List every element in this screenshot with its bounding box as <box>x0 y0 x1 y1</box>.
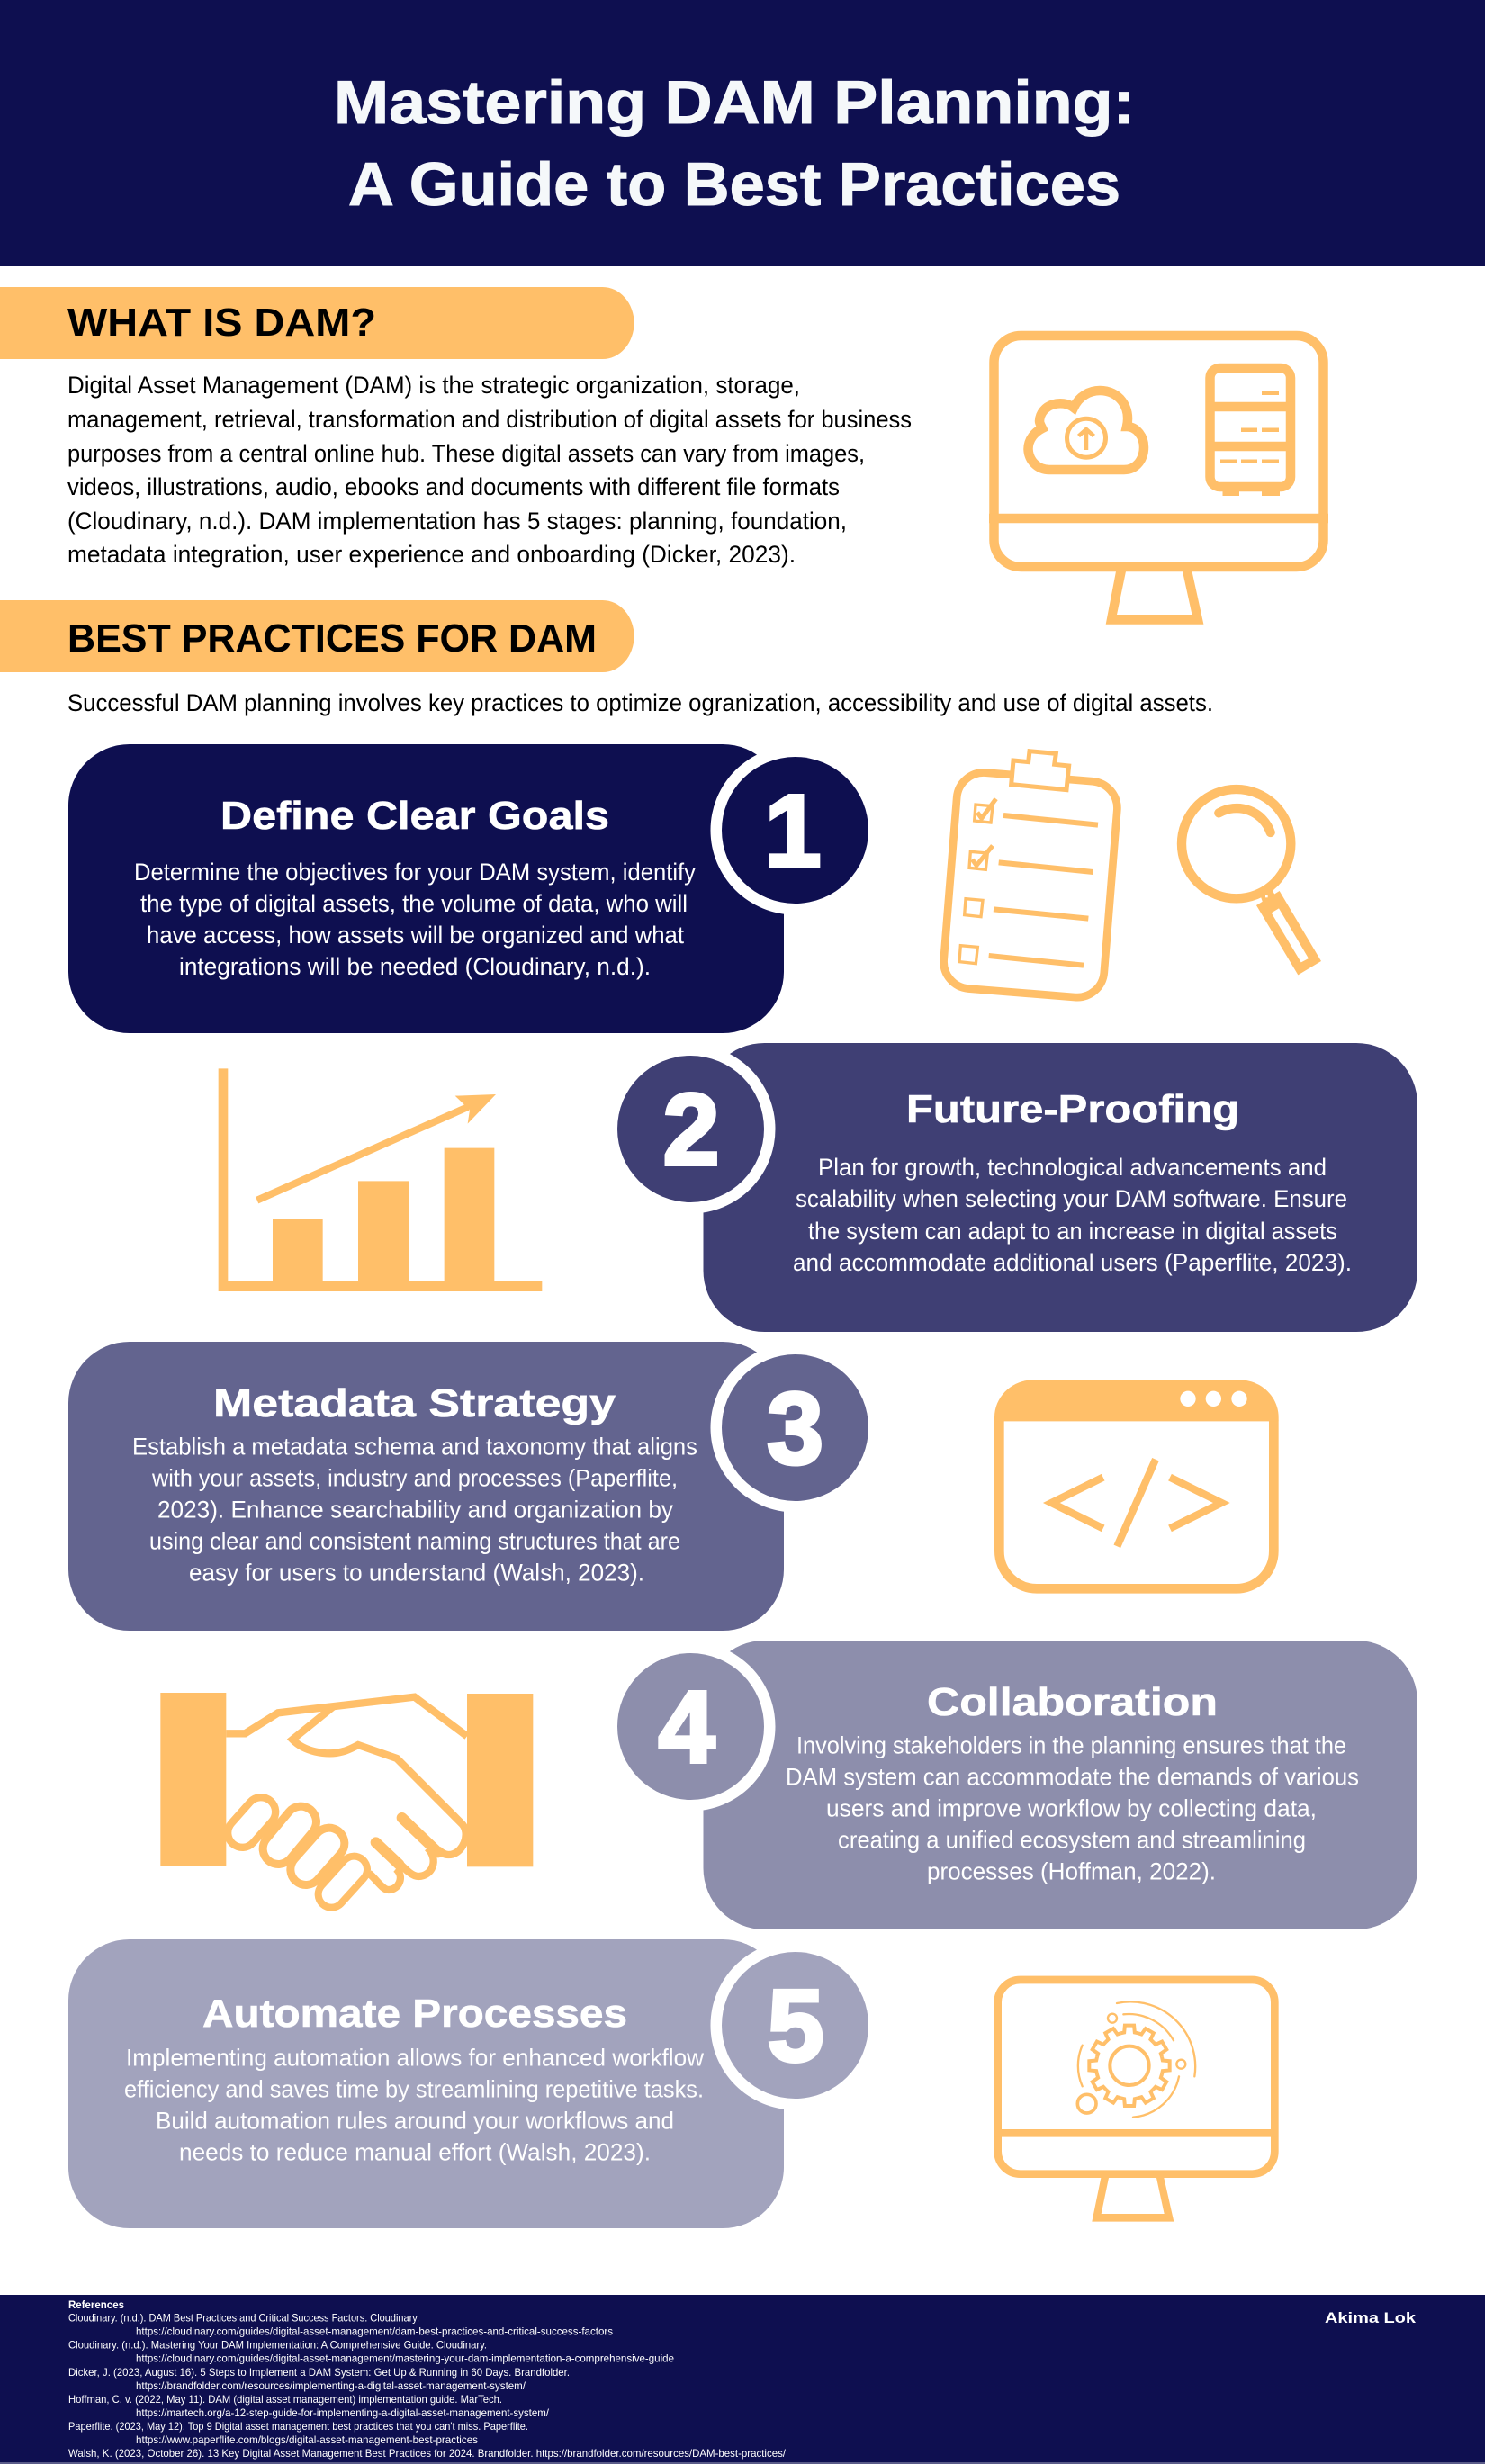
number badge 3: 3 <box>767 1371 824 1485</box>
text block: DAM definition: (Cloudinary, n.d.). DAM implementation has 5 stages: planning, foundation, <box>68 508 847 535</box>
body text: the system can adapt to an increase in digital assets <box>808 1218 1337 1245</box>
icon: magnifying glass <box>1182 789 1321 975</box>
body text: processes (Hoffman, 2022). <box>927 1857 1216 1884</box>
body text: using clear and consistent naming structures that are <box>149 1528 680 1555</box>
text block: DAM definition: management, retrieval, transformation and distribution of digital assets for business <box>68 406 912 433</box>
references <box>68 2298 787 2460</box>
number badge 2 <box>607 1044 776 1213</box>
heading: Metadata Strategy <box>213 1381 616 1425</box>
number badge 1: 1 <box>765 774 821 887</box>
body text: with your assets, industry and processes (Paperflite, <box>151 1465 678 1492</box>
text block: DAM definition: purposes from a central online hub. These digital assets can vary from images, <box>68 440 865 467</box>
body text: needs to reduce manual effort (Walsh, 2023). <box>179 2138 651 2165</box>
icon: growth bar chart <box>219 1068 542 1291</box>
body text: Determine the objectives for your DAM system, identify <box>134 859 696 886</box>
body text <box>132 1433 698 1586</box>
number badge 5 <box>711 1940 880 2109</box>
heading: Define Clear Goals <box>220 794 609 838</box>
author credit: Akima Lok <box>1325 2309 1417 2326</box>
references: https://www.paperflite.com/blogs/digital-asset-management-best-practices <box>136 2433 478 2446</box>
body text: DAM system can accommodate the demands of various <box>786 1764 1359 1791</box>
body text: Establish a metadata schema and taxonomy that aligns <box>132 1433 698 1460</box>
section heading: what is DAM: WHAT IS DAM? <box>68 301 376 345</box>
number badge 1 <box>711 745 880 914</box>
number badge 4: 4 <box>659 1670 716 1784</box>
icon: monitor with gear <box>994 1980 1278 2222</box>
number badge 4 <box>607 1641 776 1811</box>
heading: Future-Proofing <box>906 1087 1239 1131</box>
icon: monitor with cloud and server <box>989 336 1328 625</box>
footer band <box>0 2295 1485 2464</box>
body text: users and improve workflow by collecting data, <box>826 1794 1317 1821</box>
body text: have access, how assets will be organized and what <box>147 922 684 949</box>
body text: Build automation rules around your workflows and <box>156 2108 674 2135</box>
title: A Guide to Best Practices <box>348 150 1120 219</box>
references: References <box>68 2298 124 2311</box>
panel: 4 collaboration <box>607 1641 1418 1929</box>
body text: scalability when selecting your DAM software. Ensure <box>796 1185 1347 1212</box>
references: https://martech.org/a-12-step-guide-for-implementing-a-digital-asset-management-system/ <box>136 2406 550 2419</box>
heading: Automate Processes <box>202 1992 627 2036</box>
section heading: best practices <box>0 600 634 672</box>
body text: Implementing automation allows for enhanced workflow <box>126 2045 704 2072</box>
body text <box>134 859 696 980</box>
panel: 3 metadata strategy <box>68 1342 880 1631</box>
body text: easy for users to understand (Walsh, 2023). <box>189 1559 644 1586</box>
body text <box>124 2045 704 2165</box>
icon: code window <box>994 1380 1279 1588</box>
body text: and accommodate additional users (Paperflite, 2023). <box>793 1249 1352 1276</box>
references: Cloudinary. (n.d.). Mastering Your DAM Implementation: A Comprehensive Guide. Cloudinary. <box>68 2338 487 2351</box>
title <box>334 68 1135 219</box>
text block: best practices intro: Successful DAM planning involves key practices to optimize ogranization, accessibility and use of digital assets. <box>68 689 1213 716</box>
title: Mastering DAM Planning: <box>334 68 1135 137</box>
panel: 5 automate processes <box>68 1939 880 2228</box>
body text <box>793 1154 1352 1276</box>
heading: Collaboration <box>927 1680 1218 1724</box>
references: Cloudinary. (n.d.). DAM Best Practices and Critical Success Factors. Cloudinary. <box>68 2311 419 2324</box>
body text: Plan for growth, technological advancements and <box>818 1154 1327 1181</box>
number badge 3 <box>711 1343 880 1512</box>
references: https://brandfolder.com/resources/implementing-a-digital-asset-management-system/ <box>136 2379 526 2392</box>
text block: DAM definition: Digital Asset Management (DAM) is the strategic organization, storage, <box>68 372 800 399</box>
text block: DAM definition: videos, illustrations, audio, ebooks and documents with different file formats <box>68 473 840 500</box>
body text: Involving stakeholders in the planning ensures that the <box>796 1731 1346 1758</box>
section heading: best practices: BEST PRACTICES FOR DAM <box>68 616 597 661</box>
number badge 2: 2 <box>663 1073 719 1186</box>
header banner <box>0 0 1485 266</box>
section heading: what is DAM <box>0 287 634 359</box>
number badge 5: 5 <box>768 1969 824 2082</box>
icon: clipboard checklist <box>941 751 1120 999</box>
panel: 2 future-proofing <box>607 1043 1418 1332</box>
body text <box>786 1731 1359 1884</box>
body text: efficiency and saves time by streamlining repetitive tasks. <box>124 2075 704 2102</box>
references: Hoffman, C. v. (2022, May 11). DAM (digital asset management) implementation guide. MarTech. <box>68 2393 502 2406</box>
text block: DAM definition <box>68 372 912 568</box>
references: Dicker, J. (2023, August 16). 5 Steps to Implement a DAM System: Get Up & Running in 60 Days. Brandfolder. <box>68 2366 570 2379</box>
body text: 2023). Enhance searchability and organization by <box>158 1496 673 1523</box>
text block: DAM definition: metadata integration, user experience and onboarding (Dicker, 2023). <box>68 541 796 568</box>
body text: integrations will be needed (Cloudinary, n.d.). <box>179 953 651 980</box>
references: Paperflite. (2023, May 12). Top 9 Digital asset management best practices that you can't miss. Paperflite. <box>68 2420 528 2433</box>
panel: 1 define clear goals <box>68 744 880 1033</box>
body text: creating a unified ecosystem and streamlining <box>838 1827 1306 1854</box>
references: Walsh, K. (2023, October 26). 13 Key Digital Asset Management Best Practices for 2024. Brandfolder. https://brandfolder.com/resources/DAM-best-practices/ <box>68 2447 787 2460</box>
references: https://cloudinary.com/guides/digital-asset-management/dam-best-practices-and-critical-success-factors <box>136 2325 613 2338</box>
body text: the type of digital assets, the volume of data, who will <box>140 890 688 917</box>
icon: handshake <box>160 1693 533 1894</box>
references: https://cloudinary.com/guides/digital-asset-management/mastering-your-dam-implementation-a-comprehensive-guide <box>136 2352 674 2365</box>
